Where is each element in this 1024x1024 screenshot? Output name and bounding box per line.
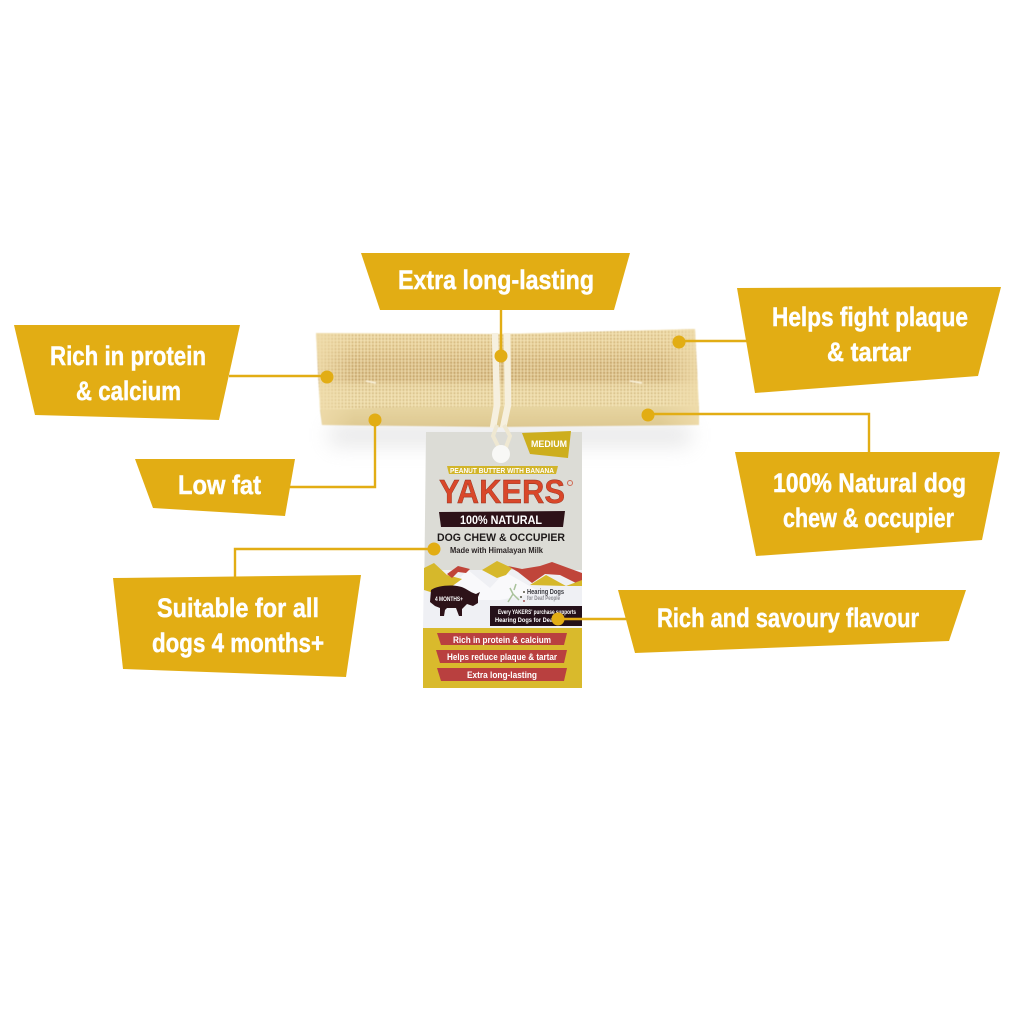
tag hole [492, 445, 510, 463]
product: yak milk chew [316, 329, 699, 446]
connector lines [229, 310, 869, 619]
charity band: Every YAKERS' purchase supports [498, 610, 577, 616]
tag string knot [493, 425, 510, 450]
icon: yak silhouette [430, 586, 480, 616]
callout: savoury flavour [618, 590, 966, 653]
medium badge: MEDIUM [531, 439, 567, 449]
callout: suitable for all dogs [113, 575, 361, 677]
natural band: 100% NATURAL [460, 513, 542, 527]
made with text: Made with Himalayan Milk [450, 545, 543, 555]
swing tag [423, 425, 582, 688]
callout: rich in protein: & calcium [76, 376, 181, 406]
tag benefit: plaque [436, 650, 567, 663]
callout: fights plaque: & tartar [827, 337, 911, 367]
callout: fights plaque [737, 287, 1001, 393]
tag benefit: protein [437, 633, 567, 645]
callout: rich in protein: Rich in protein [50, 341, 206, 371]
brand name: YAKERS [439, 473, 565, 510]
callout: savoury flavour: Rich and savoury flavour [657, 603, 919, 633]
tag benefit: plaque: Helps reduce plaque & tartar [447, 652, 557, 662]
callout: low fat: Low fat [178, 470, 261, 500]
callout: 100% natural: chew & occupier [783, 503, 954, 533]
flavour strip: PEANUT BUTTER WITH BANANA [450, 468, 554, 475]
callout: 100% natural: 100% Natural dog [773, 468, 966, 498]
hearing dogs logo: Hearing Dogs [527, 589, 564, 596]
hearing dogs logo [508, 584, 564, 602]
callout: 100% natural [735, 452, 1000, 556]
callout: suitable for all dogs: dogs 4 months+ [152, 628, 324, 658]
tag card [423, 432, 582, 688]
product descriptor: DOG CHEW & OCCUPIER [437, 532, 565, 544]
callout: extra long-lasting: Extra long-lasting [398, 265, 594, 295]
charity band: Hearing Dogs for Deaf [495, 618, 556, 624]
natural band [439, 511, 565, 527]
chew shadow [330, 424, 690, 446]
tag benefit: lasting [437, 668, 567, 681]
callout: rich in protein [14, 325, 240, 420]
charity band [490, 606, 582, 626]
callout: extra long-lasting [361, 253, 630, 310]
callout: low fat [135, 459, 295, 516]
tag benefit: lasting: Extra long-lasting [467, 670, 537, 680]
connector dots [320, 336, 686, 626]
callout: suitable for all dogs: Suitable for all [157, 593, 319, 623]
tag benefit: protein: Rich in protein & calcium [453, 635, 551, 645]
hearing dogs logo: for Deaf People [527, 596, 560, 602]
medium badge [522, 431, 571, 458]
string around chew [493, 333, 508, 428]
callout: fights plaque: Helps fight plaque [772, 302, 968, 332]
registered mark [568, 480, 572, 486]
chew textured body [316, 329, 699, 427]
mountain scene [423, 561, 582, 628]
tag benefits panel [423, 628, 582, 688]
icon: yak silhouette: 4 MONTHS+ [435, 596, 463, 603]
